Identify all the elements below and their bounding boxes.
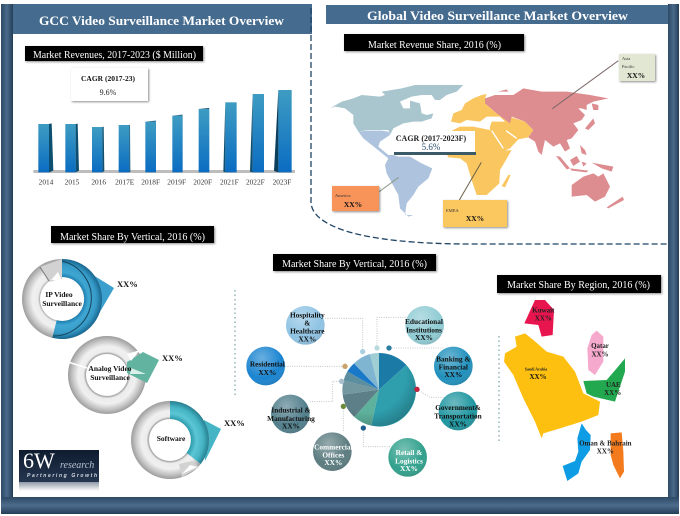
axis labels: 2022F [246,177,265,186]
bubble: Educational Institutions [405,306,444,345]
bar 2020F [199,108,209,172]
map: North America [330,85,463,135]
logo: 6W research: research [60,460,94,471]
donut label: IP Video [45,290,73,299]
region: Saudi Arabia: Saudi Arabia [525,366,547,371]
bubble: Retail and Logistics: Retail & [396,448,422,457]
region: Qatar: XX% [591,350,609,358]
map: Asia [485,88,608,155]
region: Qatar: Qatar [591,342,609,350]
bubble: Government and Transportation [434,392,482,430]
bubble: Industrial and Manufacturing [267,395,315,433]
region: UAE [583,358,625,402]
region: Bahrain [611,432,624,478]
bubble: Industrial and Manufacturing: Industrial & [271,406,311,415]
axis labels [39,177,291,186]
callout: America [332,186,379,211]
bubble: Hospitality and Healthcare: XX% [298,335,316,344]
bubble: Banking and Financial: XX% [444,370,462,379]
callout: Asia Pacific [619,54,655,81]
region: Saudi Arabia [504,333,600,438]
region: UAE: XX% [604,389,621,397]
region: Kuwait [524,300,555,337]
callout: GCC CAGR [71,68,148,101]
heading: GCC overview: GCC Video Surveillance Market Overview [39,13,285,28]
map leader lines [379,61,618,200]
region: Kuwait: Kuwait [532,306,555,314]
subheading: market share by vertical left [51,226,214,243]
bubble: Government and Transportation: XX% [449,420,467,429]
bubble: Retail and Logistics: XX% [400,464,418,473]
axis labels: 2018F [141,177,160,186]
subheading: market share by region [497,275,661,293]
callout: global CAGR: CAGR (2017-2023F) [396,134,467,143]
bubble: Retail and Logistics [388,438,427,477]
donut label: Analog Video [88,364,132,373]
bar chart: market revenues [33,90,295,186]
pie chart [342,353,416,427]
donut: Analog Video Surveillance: Surveillance [90,373,130,382]
map: Asia Pacific islands [498,89,624,208]
map: Central and South America [358,131,432,217]
region: Oman [563,423,591,481]
heading: GCC overview [13,4,312,34]
axis labels: 2019F [167,177,186,186]
axis labels: 2017E [115,177,135,186]
callout: GCC CAGR: 9.6% [100,88,117,97]
callout: global CAGR [393,131,476,155]
bubble: Hospitality and Healthcare: Healthcare [290,326,325,335]
bubble: Hospitality and Healthcare [286,306,325,345]
logo: 6W research [19,448,99,491]
bar 2016 [92,127,104,172]
dashed divider between sections [311,8,668,244]
value: XX% [117,279,138,289]
subheading: market revenue share: Market Revenue Share, 2016 (%) [368,40,501,51]
callout: America: America [335,193,350,198]
logo: 6W research: 6W [23,448,55,473]
axis labels: 2020F [193,177,212,186]
bar 2017E [119,125,130,172]
bar 2014 [38,123,53,172]
callout: GCC CAGR: CAGR (2017-23) [81,74,135,83]
heading: Global overview [326,5,668,24]
donut: Analog Video Surveillance [68,336,183,414]
bubble: Commercial Offices: Commercial [314,442,353,451]
callout: Asia Pacific: Asia [622,56,630,61]
region label: Oman and Bahrain: Oman & Bahrain [579,439,632,447]
vertical dotted separators [235,290,499,442]
bubble: Hospitality and Healthcare: Hospitality [290,311,325,320]
bubble: Educational Institutions: Educational [405,317,443,326]
bubble: Government and Transportation: Government& [435,403,481,412]
subheading: market share by vertical centre [273,254,436,271]
bubble: Government and Transportation: Transportation [434,411,482,420]
bubble: Residential: Residential [250,360,285,369]
value: XX% [224,418,245,428]
value: XX% [162,353,183,363]
axis labels: 2023F [273,177,291,186]
bar 2015 [65,124,79,172]
subheading: market revenues: Market Revenues, 2017-2023 ($ Million) [33,50,196,61]
callout: Asia Pacific: Pacific [622,64,634,69]
bar 2023F [274,90,292,172]
bar 2018F [145,121,156,172]
donut: IP Video Surveillance: Surveillance [42,299,82,308]
subheading: market revenues [25,46,203,61]
donut: Software [131,401,245,479]
axis labels: 2015 [65,177,80,186]
bubble: Banking and Financial [434,347,473,385]
callout: EMEA: XX% [466,214,484,223]
callout: America: XX% [344,200,362,209]
bubble: Educational Institutions: Institutions [406,325,442,334]
bubble: Industrial and Manufacturing: Manufacturing [267,414,315,423]
axis labels: 2021F [220,177,239,186]
world map: Americas [330,85,463,217]
connectors [285,317,443,447]
vertical market pie with bubbles [246,306,482,477]
connector dots [339,345,420,431]
callout: EMEA [443,200,507,227]
axis labels: 2014 [39,177,54,186]
map: Europe Middle East Africa [447,94,533,195]
logo: 6W research: Partnering Growth [27,473,97,479]
leader line: EMEA [459,162,481,200]
bubble: Commercial Offices [313,432,353,471]
leader line: America [379,177,399,192]
callout: Asia Pacific: XX% [627,71,645,80]
bar 2022F [250,94,264,172]
bubble: Hospitality and Healthcare: & [304,318,310,327]
bubble: Banking and Financial: Financial [439,362,468,371]
subheading: market share by region: Market Share By Region, 2016 (%) [507,280,650,291]
bubble: Commercial Offices: XX% [324,458,342,467]
bubble: Retail and Logistics: Logistics [395,456,423,465]
subheading: market share by vertical centre: Market Share By Vertical, 2016 (%) [282,259,427,270]
heading: Global overview: Global Video Surveillance Market Overview [367,9,628,23]
donut: IP Video Surveillance [22,259,138,339]
bar 2019F [172,115,183,172]
region: Qatar [587,331,609,375]
bubble: Banking and Financial: Banking & [436,354,471,363]
region: UAE: UAE [606,381,621,389]
leader line: Asia Pacific [552,61,618,109]
bubble: Industrial and Manufacturing: XX% [282,422,300,431]
world map: EMEA and Asia Pacific [447,88,624,208]
subheading: market revenue share [344,34,524,51]
region: Kuwait: XX% [535,315,552,323]
callout: EMEA: EMEA [446,208,459,213]
bubble: Educational Institutions: XX% [415,333,433,342]
region map [504,300,632,481]
bubble: Residential: XX% [258,368,276,377]
region: Saudi Arabia: XX% [529,373,547,381]
bubble: Residential [246,347,285,385]
region label: Oman and Bahrain: XX% [597,448,614,456]
bar 2021F [223,102,237,172]
subheading: market share by vertical left: Market Share By Vertical, 2016 (%) [60,232,205,243]
donut label: Software [157,434,186,443]
callout: global CAGR: 5.6% [422,142,441,152]
axis labels: 2016 [91,177,106,186]
bubble: Commercial Offices: Offices [322,450,344,459]
